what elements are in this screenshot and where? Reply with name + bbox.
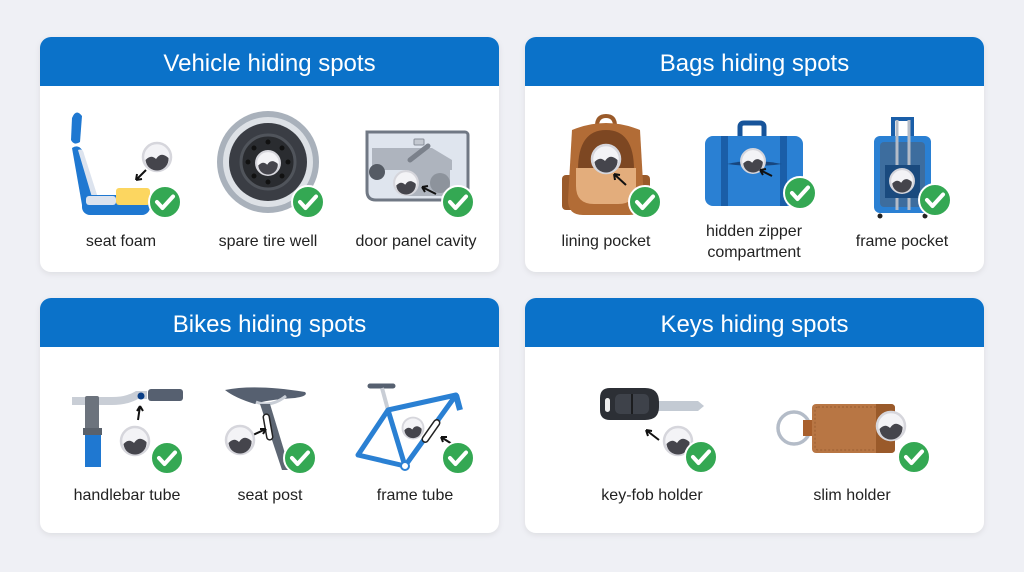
label: hidden zipper: compartment [707, 244, 801, 261]
icon: luggage [874, 119, 951, 218]
panel: vehicle [40, 37, 499, 272]
label: seat post: seat post [238, 487, 303, 504]
icon: slim holder [778, 404, 930, 473]
panel: bags [525, 37, 984, 272]
label: lining pocket: lining pocket [562, 233, 651, 250]
label: key fob: key-fob holder [601, 487, 703, 504]
label: seat foam: seat foam [86, 233, 156, 250]
heading: bikes [40, 298, 499, 347]
heading: bikes: Bikes hiding spots [173, 311, 366, 338]
panel: bikes [40, 298, 499, 533]
icon: spare tire [217, 111, 324, 218]
label: door panel: door panel cavity [356, 233, 476, 250]
label: frame pocket: frame pocket [856, 233, 949, 250]
heading: vehicle [40, 37, 499, 86]
icon: door panel [367, 132, 474, 218]
label: slim holder: slim holder [813, 487, 891, 504]
icon: key fob [600, 388, 717, 473]
heading: bags [525, 37, 984, 86]
heading: keys [525, 298, 984, 347]
heading: keys: Keys hiding spots [660, 311, 849, 338]
icon: bike frame [358, 386, 474, 474]
icon: backpack [562, 116, 661, 218]
panel: keys [525, 298, 984, 533]
icon: seat post [225, 387, 316, 474]
heading: bags: Bags hiding spots [660, 50, 849, 77]
icon: handlebar [72, 389, 183, 474]
icon: seat foam [71, 112, 181, 218]
heading: vehicle: Vehicle hiding spots [163, 50, 376, 77]
label: hidden zipper: hidden zipper [706, 223, 803, 240]
label: frame tube: frame tube [377, 487, 453, 504]
label: handlebar: handlebar tube [74, 487, 180, 504]
label: spare tire: spare tire well [219, 233, 317, 250]
icon: suitcase [705, 123, 816, 209]
